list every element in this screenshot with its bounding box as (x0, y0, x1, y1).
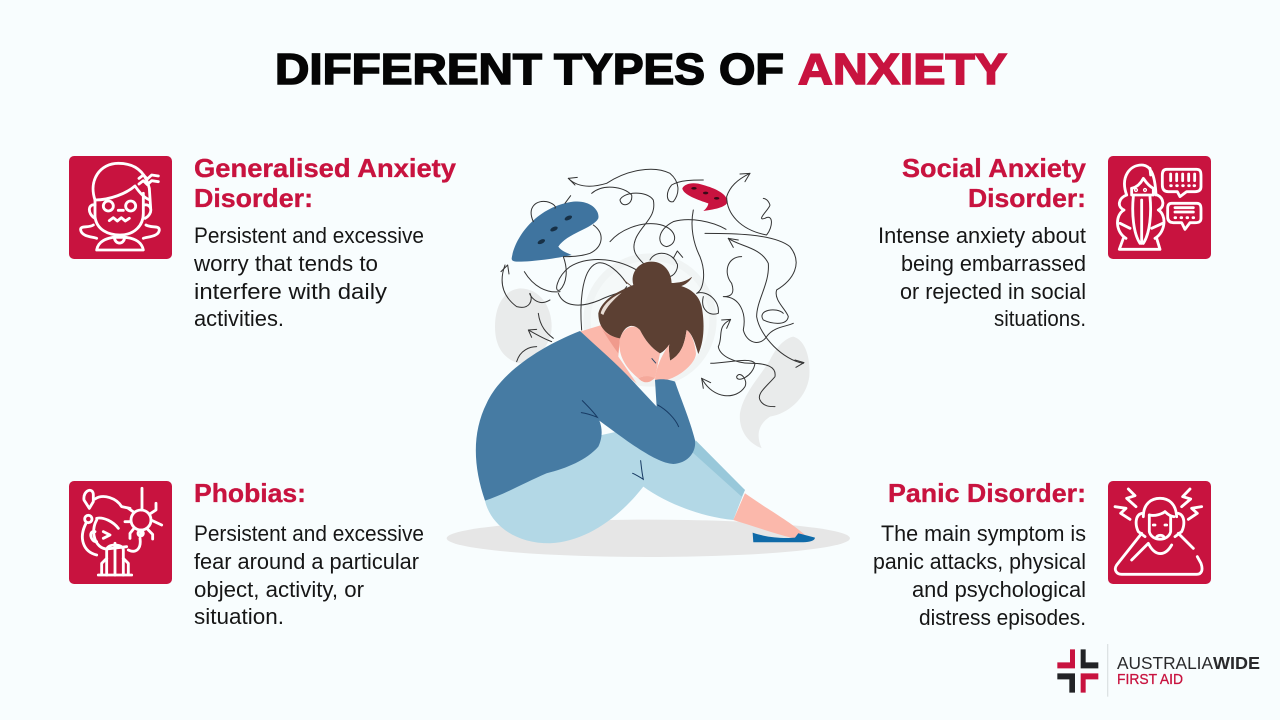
text block (193, 223, 424, 331)
panel: generalised anxiety disorder (69, 153, 457, 331)
icon: person holding head with lightning (1108, 481, 1211, 584)
panel: panic disorder (873, 478, 1211, 630)
text block (878, 223, 1086, 331)
heading: Disorder: (194, 183, 313, 213)
title: ANXIETY (798, 45, 1007, 94)
logo: Australia Wide First Aid: WIDE (1213, 653, 1260, 673)
text block: situation. (194, 604, 284, 629)
text block: Persistent and excessive (194, 521, 424, 546)
hand on head (655, 330, 696, 382)
title: TYPES (554, 45, 705, 94)
heading: Disorder: (968, 183, 1086, 213)
text block: fear around a particular (194, 549, 419, 574)
shoe (753, 533, 815, 542)
heading: Phobias: (194, 478, 306, 508)
logo: Australia Wide First Aid: FIRST AID (1117, 671, 1183, 688)
text block: The main symptom is (881, 521, 1086, 546)
sweater (476, 331, 695, 501)
text block: Intense anxiety about (878, 223, 1086, 248)
face (619, 327, 660, 378)
text block: being embarrassed (901, 251, 1086, 276)
heading: Social Anxiety (902, 153, 1087, 183)
heading: Panic Disorder: (888, 478, 1086, 508)
hair (598, 262, 704, 361)
heading: Generalised Anxiety (194, 153, 457, 183)
panel: phobias (69, 478, 424, 629)
ground shadow (447, 520, 850, 557)
panel: social anxiety disorder (878, 153, 1211, 331)
head halo (583, 253, 717, 387)
title (275, 45, 1007, 94)
neck (580, 325, 637, 383)
title: OF (719, 45, 784, 94)
leg and foot (733, 493, 807, 538)
text block: object, activity, or (194, 577, 364, 602)
icon: worried face (69, 156, 172, 259)
head (580, 262, 704, 383)
logo: Australia Wide First Aid: AUSTRALIA (1117, 653, 1213, 673)
text block: distress episodes. (919, 605, 1086, 630)
icon: person afraid of spider (69, 481, 172, 584)
text block: situations. (994, 306, 1086, 331)
icon: person with speech bubbles (1108, 156, 1211, 259)
text block: or rejected in social (900, 279, 1086, 304)
grey thought bubbles (495, 288, 809, 448)
logo: Australia Wide First Aid (1057, 644, 1260, 697)
title: DIFFERENT (275, 45, 542, 94)
blue speech bubble (512, 201, 598, 262)
text block: interfere with daily (194, 279, 387, 304)
heading (194, 153, 457, 213)
text block: panic attacks, physical (873, 549, 1086, 574)
trousers (485, 427, 745, 543)
text block: worry that tends to (193, 251, 378, 276)
clothing creases (581, 401, 679, 479)
text block: Persistent and excessive (194, 223, 424, 248)
red speech bubble (682, 183, 728, 211)
heading (902, 153, 1087, 213)
text block (873, 521, 1086, 630)
text block: and psychological (912, 577, 1086, 602)
illustration: anxious woman with tangled thoughts (447, 169, 850, 557)
tangled thought lines (501, 169, 804, 407)
text block (194, 521, 424, 629)
text block: activities. (194, 306, 284, 331)
